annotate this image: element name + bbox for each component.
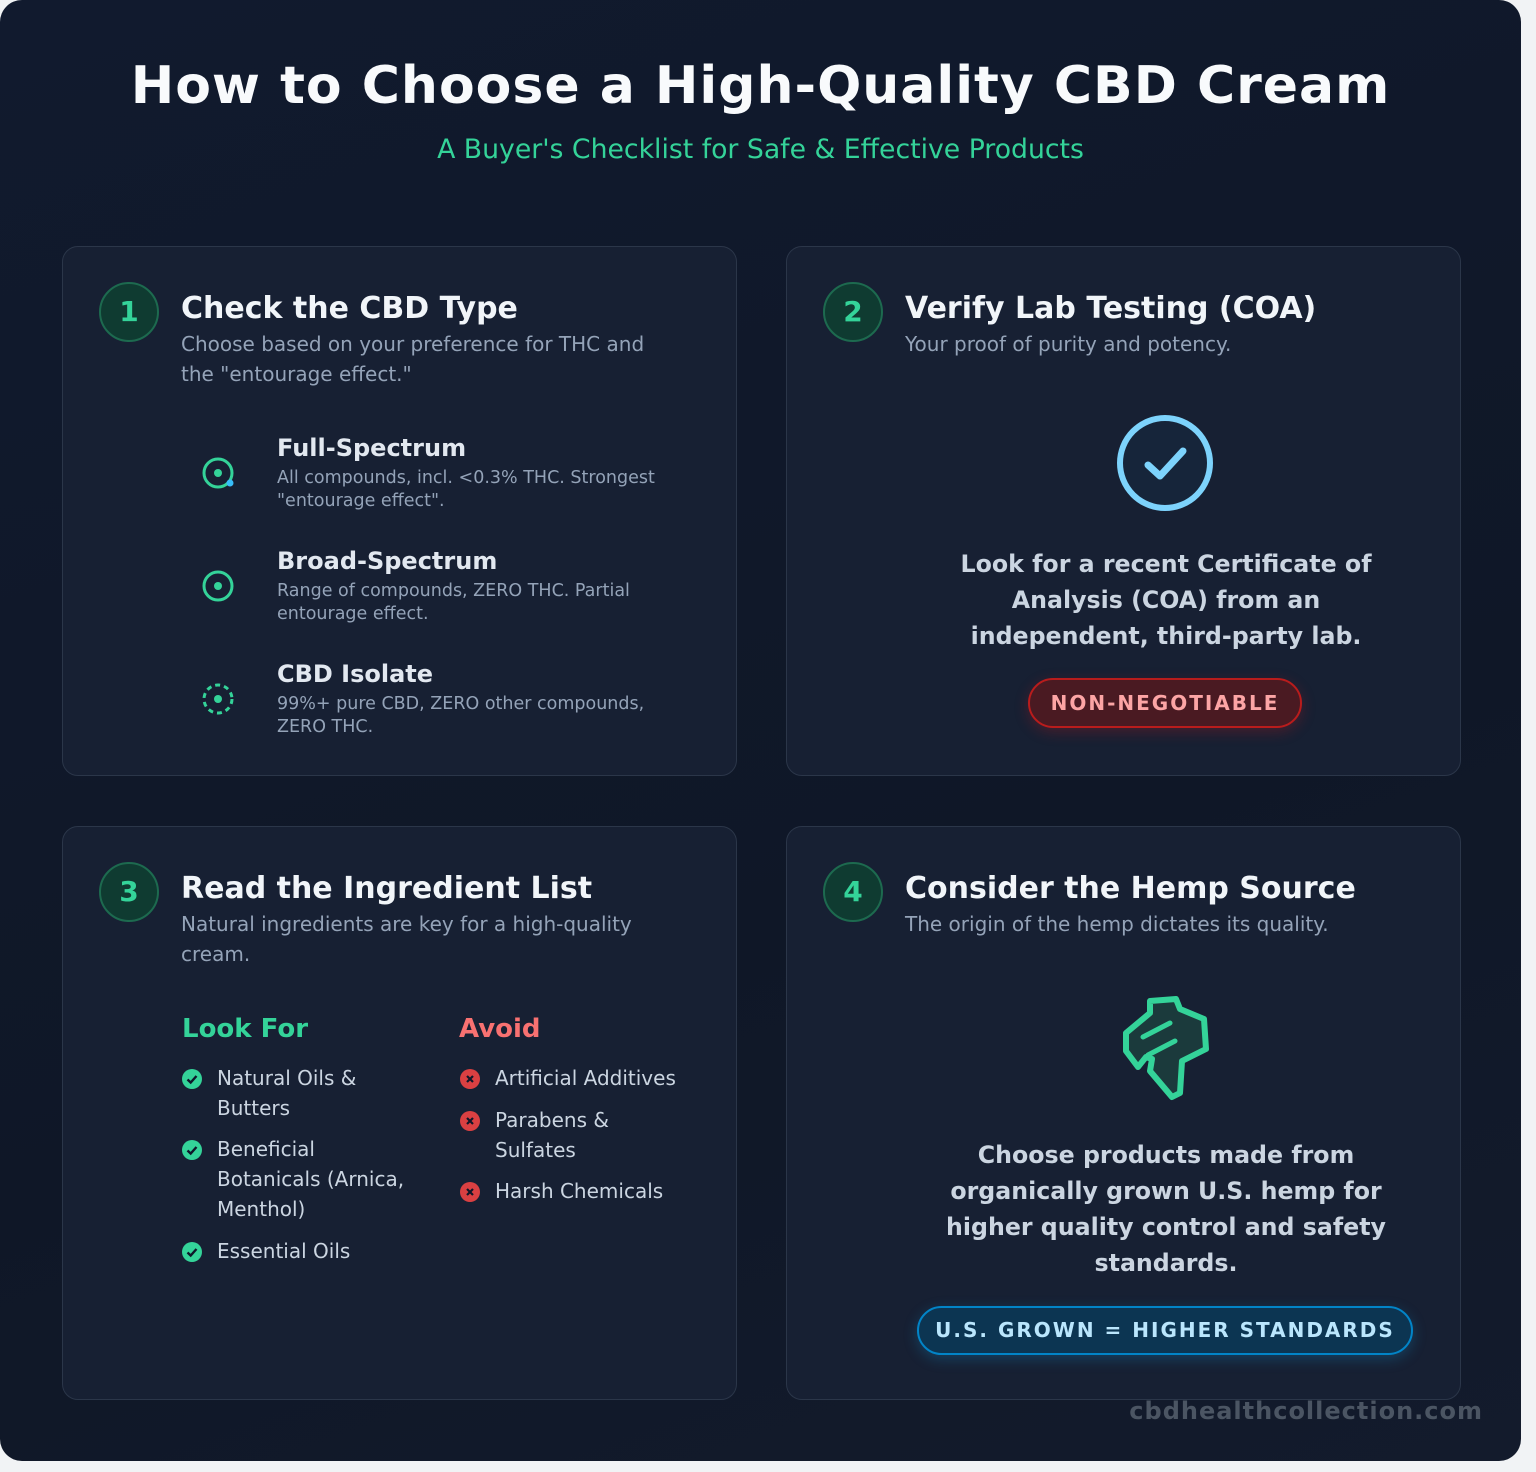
subtitle: A Buyer's Checklist for Safe & Effective Products — [437, 134, 1084, 165]
subtitle: Your proof of purity and potency. — [905, 332, 1231, 356]
panel: 4 hemp source — [786, 826, 1461, 1400]
list item: Harsh Chemicals — [495, 1179, 663, 1203]
list item — [460, 1108, 609, 1162]
item: broad-spectrum: Range of compounds, ZERO THC. Partial — [277, 581, 630, 601]
number badge 3 — [99, 862, 159, 922]
subtitle: Natural ingredients are key for a high-quality cream. — [181, 912, 632, 966]
panel: 1 CBD type — [62, 246, 737, 776]
text: COA — [960, 550, 1372, 650]
list item: Natural Oils & — [217, 1066, 356, 1090]
number badge 3: 3 — [119, 875, 139, 908]
number badge 1: 1 — [119, 295, 139, 328]
number badge 2: 2 — [843, 295, 863, 328]
item: isolate: 99%+ pure CBD, ZERO other compounds, — [277, 694, 644, 714]
text: COA: Analysis (COA) from an — [1012, 586, 1320, 614]
badge: US grown: U.S. GROWN = HIGHER STANDARDS — [935, 1318, 1395, 1342]
heading: Consider the Hemp Source — [905, 871, 1356, 906]
heading: Check the CBD Type — [181, 291, 518, 326]
item: isolate: CBD Isolate — [277, 660, 433, 688]
number badge 2 — [823, 282, 883, 342]
item: broad-spectrum — [277, 547, 630, 624]
item: full-spectrum — [277, 434, 655, 511]
icon: isolate — [202, 684, 234, 714]
list item: Sulfates — [495, 1138, 576, 1162]
column: look for — [182, 1014, 404, 1263]
icon: broad-spectrum — [202, 570, 234, 602]
footer: website: cbdhealthcollection.com — [1129, 1397, 1483, 1425]
title: How to Choose a High-Quality CBD Cream — [131, 56, 1390, 116]
list item: Parabens & — [495, 1108, 609, 1132]
heading: Read the Ingredient List — [181, 871, 592, 906]
heading: Verify Lab Testing (COA) — [905, 291, 1316, 326]
heading avoid: Avoid — [459, 1014, 541, 1044]
text: hemp source: Choose products made from — [978, 1141, 1354, 1169]
item: full-spectrum: Full-Spectrum — [277, 434, 466, 462]
item: full-spectrum: All compounds, incl. <0.3% THC. Strongest — [277, 468, 655, 488]
text: hemp source: standards. — [1095, 1249, 1237, 1277]
icon: check circle — [1117, 415, 1213, 511]
text: hemp source: higher quality control and safety — [946, 1213, 1386, 1241]
item: broad-spectrum: entourage effect. — [277, 604, 429, 624]
list item: Butters — [217, 1096, 290, 1120]
list item: Botanicals (Arnica, — [217, 1167, 404, 1191]
heading look for: Look For — [182, 1014, 308, 1044]
badge: non-negotiable — [1028, 678, 1302, 728]
number badge 4: 4 — [843, 875, 863, 908]
number badge 1 — [99, 282, 159, 342]
subtitle: Choose based on your preference for THC and the "entourage effect." — [181, 332, 644, 386]
item: isolate — [277, 660, 644, 737]
list item: Beneficial — [217, 1137, 315, 1161]
item: isolate: ZERO THC. — [277, 717, 373, 737]
subtitle: The origin of the hemp dictates its quality. — [905, 912, 1329, 936]
list item: Artificial Additives — [495, 1066, 676, 1090]
item: broad-spectrum: Broad-Spectrum — [277, 547, 497, 575]
column: avoid — [459, 1014, 676, 1203]
panel: 3 ingredients — [62, 826, 737, 1400]
text: hemp source — [946, 1141, 1386, 1277]
list item: Essential Oils — [217, 1239, 350, 1263]
icon: US map — [1123, 996, 1209, 1100]
number badge 4 — [823, 862, 883, 922]
list item — [182, 1066, 356, 1120]
text: hemp source: organically grown U.S. hemp for — [950, 1177, 1382, 1205]
text: COA: Look for a recent Certificate of — [960, 550, 1372, 578]
text: COA: independent, third-party lab. — [971, 622, 1361, 650]
list item — [182, 1137, 404, 1221]
badge: non-negotiable: NON-NEGOTIABLE — [1051, 691, 1279, 715]
icon: full-spectrum — [202, 458, 234, 488]
badge: US grown — [917, 1306, 1413, 1355]
list item: Menthol) — [217, 1197, 305, 1221]
item: full-spectrum: "entourage effect". — [277, 491, 445, 511]
panel: 2 lab testing — [786, 246, 1461, 776]
